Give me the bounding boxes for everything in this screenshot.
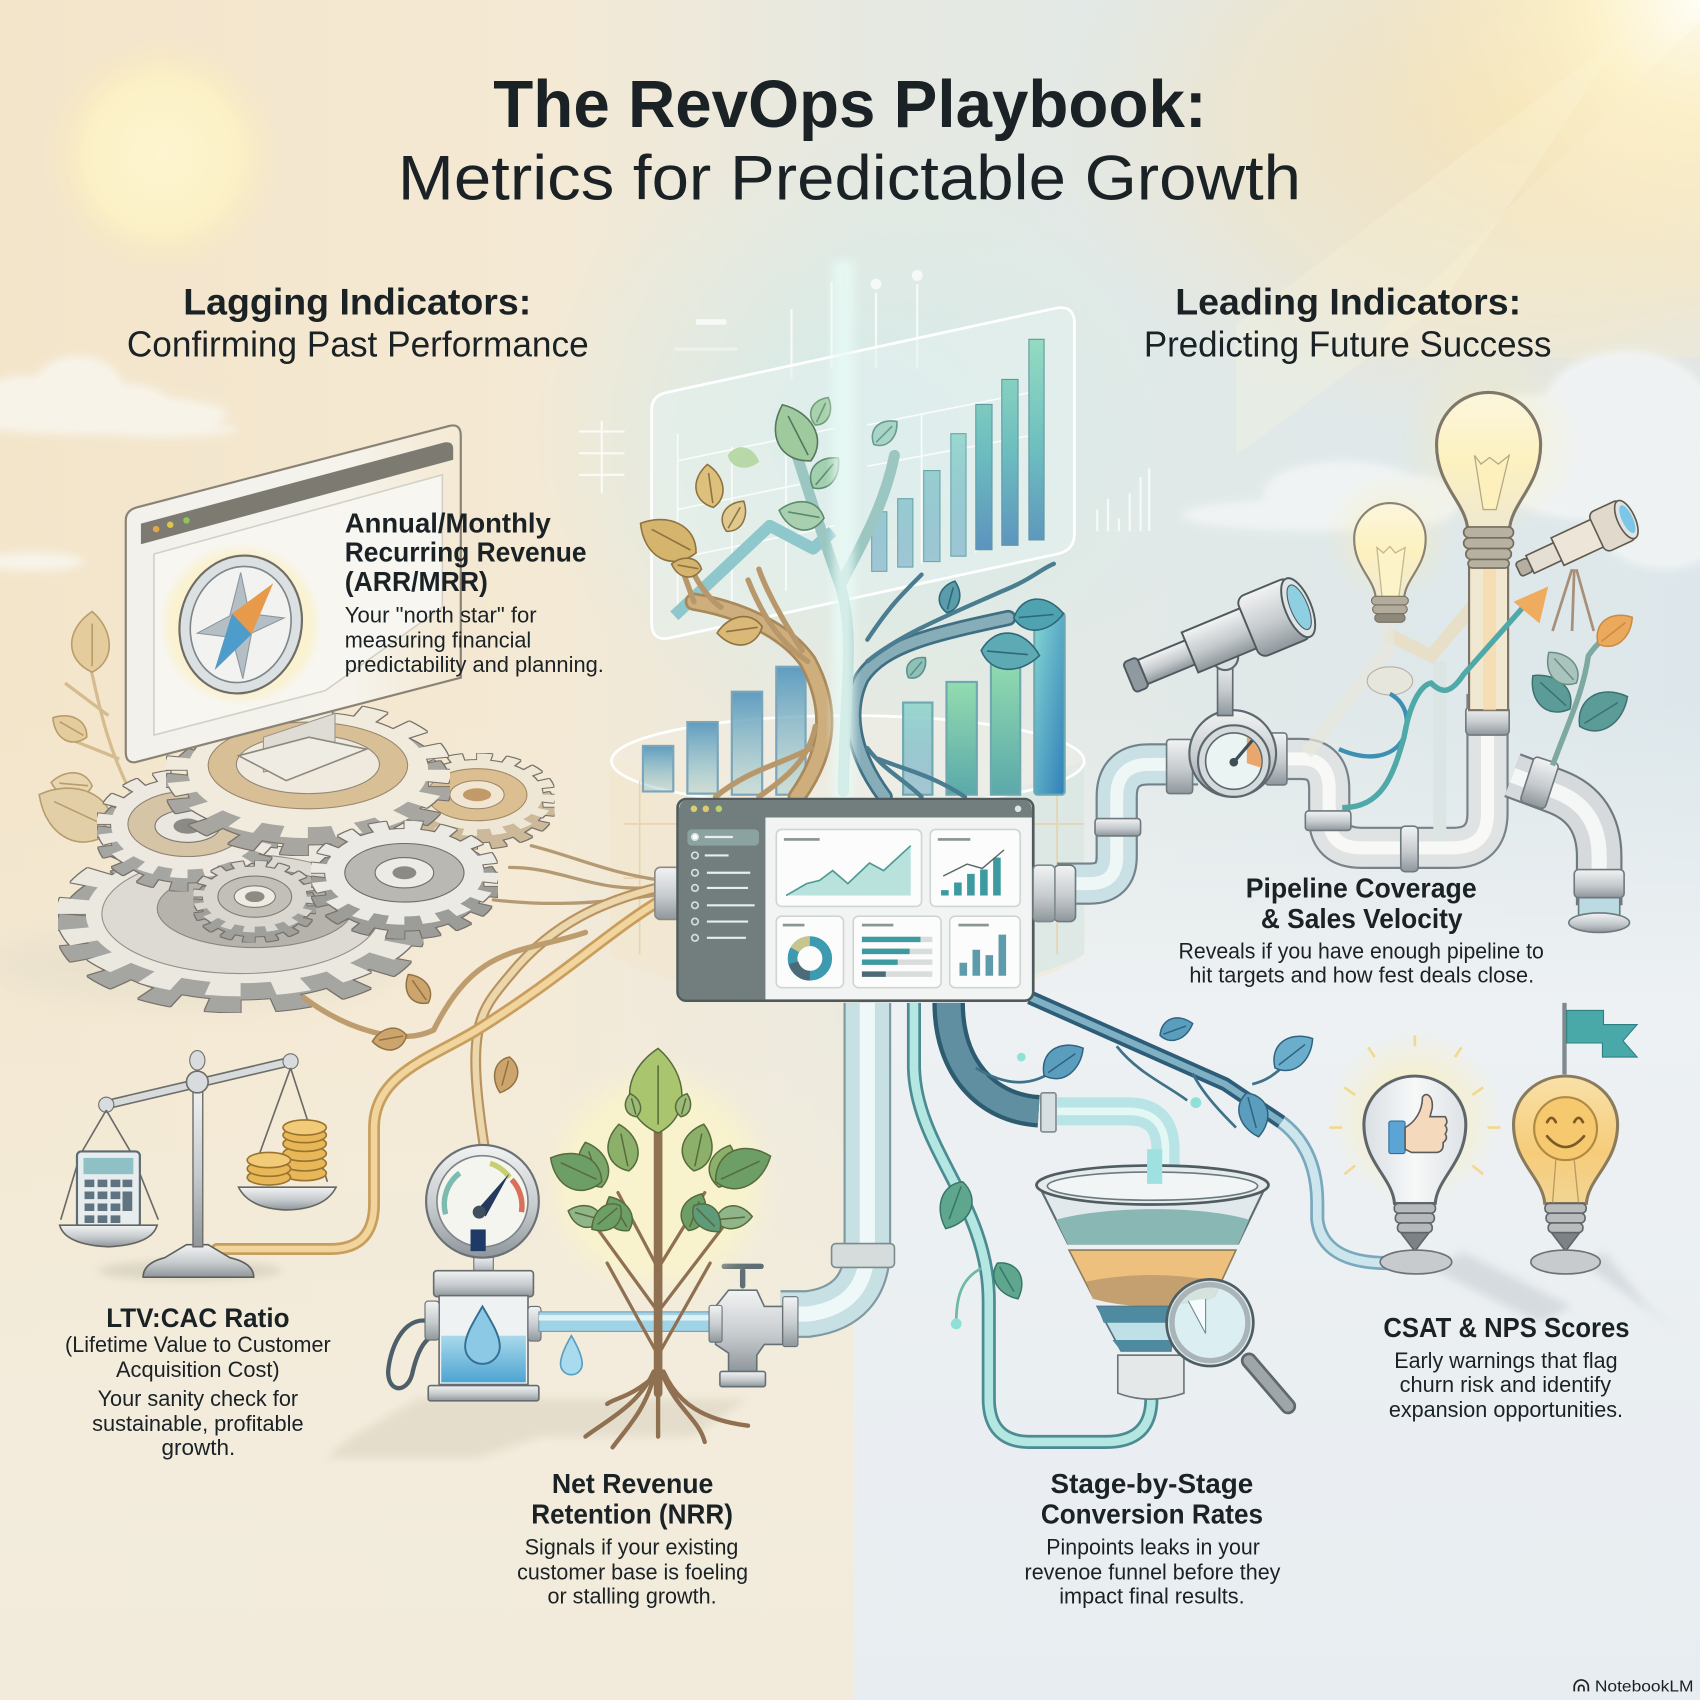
heading: leading indicators: Predicting Future Success xyxy=(1144,325,1551,365)
couplings on right pipeline xyxy=(1054,707,1630,932)
text: CSAT and NPS: expansion opportunities. xyxy=(1389,1397,1623,1422)
text: stage-by-stage conversion: Pinpoints leaks in your xyxy=(1046,1535,1260,1560)
pipes under dashboard xyxy=(781,997,1388,1442)
text: ARR/MRR: measuring financial xyxy=(345,627,531,652)
text: net revenue retention: Retention (NRR) xyxy=(531,1498,733,1529)
text: CSAT and NPS: Early warnings that flag xyxy=(1394,1348,1618,1373)
text: CSAT and NPS xyxy=(1383,1312,1630,1422)
text: ARR/MRR: (ARR/MRR) xyxy=(345,566,488,597)
text: pipeline coverage: Pipeline Coverage xyxy=(1246,873,1477,904)
text: pipeline coverage xyxy=(1179,873,1544,987)
gear: right xyxy=(407,758,547,845)
text: pipeline coverage: & Sales Velocity xyxy=(1261,903,1463,934)
bulb shadows xyxy=(1431,1252,1680,1334)
icon: small light bulb xyxy=(1325,472,1455,622)
tan leaves on roots xyxy=(371,969,522,1096)
icon: thumbs-up bulb xyxy=(1328,1030,1502,1274)
gear: top xyxy=(179,708,437,849)
text: LTV:CAC ratio: LTV:CAC Ratio xyxy=(106,1302,289,1333)
text: net revenue retention xyxy=(517,1468,748,1609)
text: LTV:CAC ratio: growth. xyxy=(162,1435,235,1460)
pipes: right side pipeline xyxy=(1057,694,1599,905)
central tree xyxy=(672,455,1054,797)
icon: computer monitor with compass xyxy=(126,425,461,781)
pipe: dashboard left coupling xyxy=(655,867,681,919)
beam of light xyxy=(833,260,854,802)
panel: glass cylinder xyxy=(610,716,1084,1003)
icon: gauge on pipeline xyxy=(1189,710,1276,797)
icon: magnifying glass xyxy=(1167,1279,1288,1406)
floating data marks xyxy=(579,271,1149,531)
text: LTV:CAC ratio: sustainable, profitable xyxy=(92,1411,304,1436)
plant behind gears xyxy=(27,611,130,855)
text: stage-by-stage conversion: Stage-by-Stage xyxy=(1051,1468,1253,1499)
shadow under pump and tree xyxy=(325,1399,748,1458)
text: ARR/MRR: Recurring Revenue xyxy=(345,537,587,568)
thin water pipe xyxy=(539,1312,712,1331)
title: Metrics for Predictable Growth xyxy=(398,143,1301,213)
text: stage-by-stage conversion xyxy=(1025,1468,1281,1609)
icon: growing tree xyxy=(543,1048,778,1447)
panel: holographic bar chart xyxy=(652,308,1074,639)
icon: small telescope with tripod xyxy=(1509,496,1643,631)
icon: telescope on pipeline xyxy=(1116,573,1323,716)
text: ARR/MRR: predictability and planning. xyxy=(345,652,604,677)
text: stage-by-stage conversion: revenoe funnel before they xyxy=(1025,1560,1281,1585)
text: LTV:CAC ratio: (Lifetime Value to Customer xyxy=(65,1332,331,1357)
pipe couplings: dashboard right xyxy=(1033,865,1055,922)
heading: lagging indicators: Confirming Past Performance xyxy=(127,325,589,365)
dashboard panel: horizontal bars xyxy=(853,916,941,988)
glass connector below small bulb xyxy=(1306,602,1477,840)
dashboard panel: bar chart with line xyxy=(930,829,1020,906)
text: stage-by-stage conversion: impact final results. xyxy=(1059,1584,1245,1609)
scale: calculator xyxy=(77,1151,140,1227)
icon: faucet xyxy=(709,1266,798,1387)
gears xyxy=(0,708,547,1008)
icon: conversion funnel xyxy=(1036,1149,1268,1399)
text: LTV:CAC ratio: Your sanity check for xyxy=(98,1386,299,1411)
text: stage-by-stage conversion: Conversion Rates xyxy=(1041,1498,1263,1529)
text: pipeline coverage: hit targets and how fest deals close. xyxy=(1189,962,1534,987)
title xyxy=(398,67,1301,213)
heading: leading indicators xyxy=(1144,281,1551,365)
gear: large base xyxy=(75,840,407,1004)
icon: water drop xyxy=(561,1336,582,1375)
chart arrow: rising green line xyxy=(1339,587,1548,808)
branches and leaves on lower pipes xyxy=(933,1013,1321,1329)
clouds right xyxy=(1182,350,1700,569)
text: pipeline coverage: Reveals if you have enough pipeline to xyxy=(1179,938,1544,963)
text: net revenue retention: or stalling growth. xyxy=(548,1584,717,1609)
scale: gold coins xyxy=(247,1120,326,1185)
text: net revenue retention: Signals if your existing xyxy=(525,1535,738,1560)
icon: pump with gauge xyxy=(388,1145,541,1401)
roots: tan connectors to dashboard xyxy=(217,846,661,1249)
text: ARR/MRR: Annual/Monthly xyxy=(345,507,551,538)
icon: balance scale xyxy=(60,1051,336,1280)
bar chart: lower left bars xyxy=(643,667,806,795)
bar chart: lower right bars xyxy=(903,613,1065,795)
text: CSAT and NPS: churn risk and identify xyxy=(1400,1372,1612,1397)
heading: leading indicators: Leading Indicators: xyxy=(1175,281,1521,322)
icon: left sun xyxy=(41,34,284,276)
icon: large light bulb xyxy=(1396,352,1581,710)
icon: compass xyxy=(165,542,317,707)
heading: lagging indicators: Lagging Indicators: xyxy=(183,281,531,322)
gear: mid right xyxy=(320,826,489,934)
heading: lagging indicators xyxy=(127,281,589,365)
text: ARR/MRR xyxy=(345,507,604,677)
dashboard panel: area chart xyxy=(776,829,922,906)
text: LTV:CAC ratio xyxy=(65,1302,331,1460)
text: CSAT and NPS: CSAT & NPS Scores xyxy=(1383,1312,1630,1343)
text: ARR/MRR: Your "north star" for xyxy=(345,602,537,627)
icon: sapling on pipe xyxy=(1522,606,1640,765)
dashboard panel: donut chart xyxy=(776,916,843,988)
text: LTV:CAC ratio: Acquisition Cost) xyxy=(116,1357,280,1382)
gear: left xyxy=(106,775,270,886)
dashboard panel: small bars xyxy=(950,916,1020,988)
gear: small centre xyxy=(199,864,310,939)
NotebookLM watermark: NotebookLM xyxy=(1595,1678,1693,1695)
icon: smiley bulb with flag xyxy=(1514,1003,1637,1274)
title: The RevOps Playbook: xyxy=(493,67,1207,142)
leaves: gold and green xyxy=(631,393,1065,682)
icon: flag xyxy=(1562,1003,1637,1074)
text: net revenue retention: Net Revenue xyxy=(552,1468,713,1499)
clouds left xyxy=(0,356,239,571)
panel: central dashboard xyxy=(678,799,1033,1001)
text: net revenue retention: customer base is foeling xyxy=(517,1560,748,1585)
